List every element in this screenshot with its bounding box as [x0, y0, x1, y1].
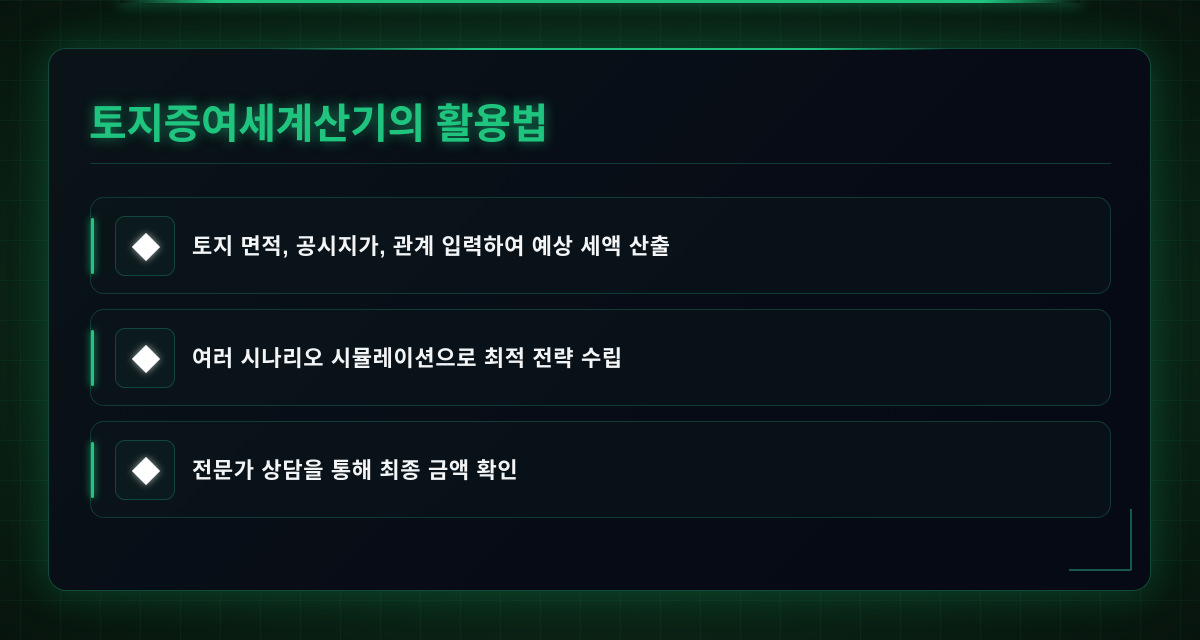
item 2: [90, 309, 1111, 406]
top glow line: [120, 0, 1080, 3]
icon: diamond: [115, 328, 175, 388]
corner bracket: [1130, 509, 1132, 569]
panel: main card: [48, 48, 1151, 591]
icon: diamond: [115, 440, 175, 500]
item 3: [90, 421, 1111, 518]
icon: diamond: [115, 216, 175, 276]
text 2: 여러 시나리오 시뮬레이션으로 최적 전략 수립: [192, 346, 623, 371]
text 1: 토지 면적, 공시지가, 관계 입력하여 예상 세액 산출: [192, 234, 671, 259]
text 3: 전문가 상담을 통해 최종 금액 확인: [192, 458, 518, 483]
title: 토지증여세계산기의 활용법: [89, 101, 548, 147]
item 1: [90, 197, 1111, 294]
